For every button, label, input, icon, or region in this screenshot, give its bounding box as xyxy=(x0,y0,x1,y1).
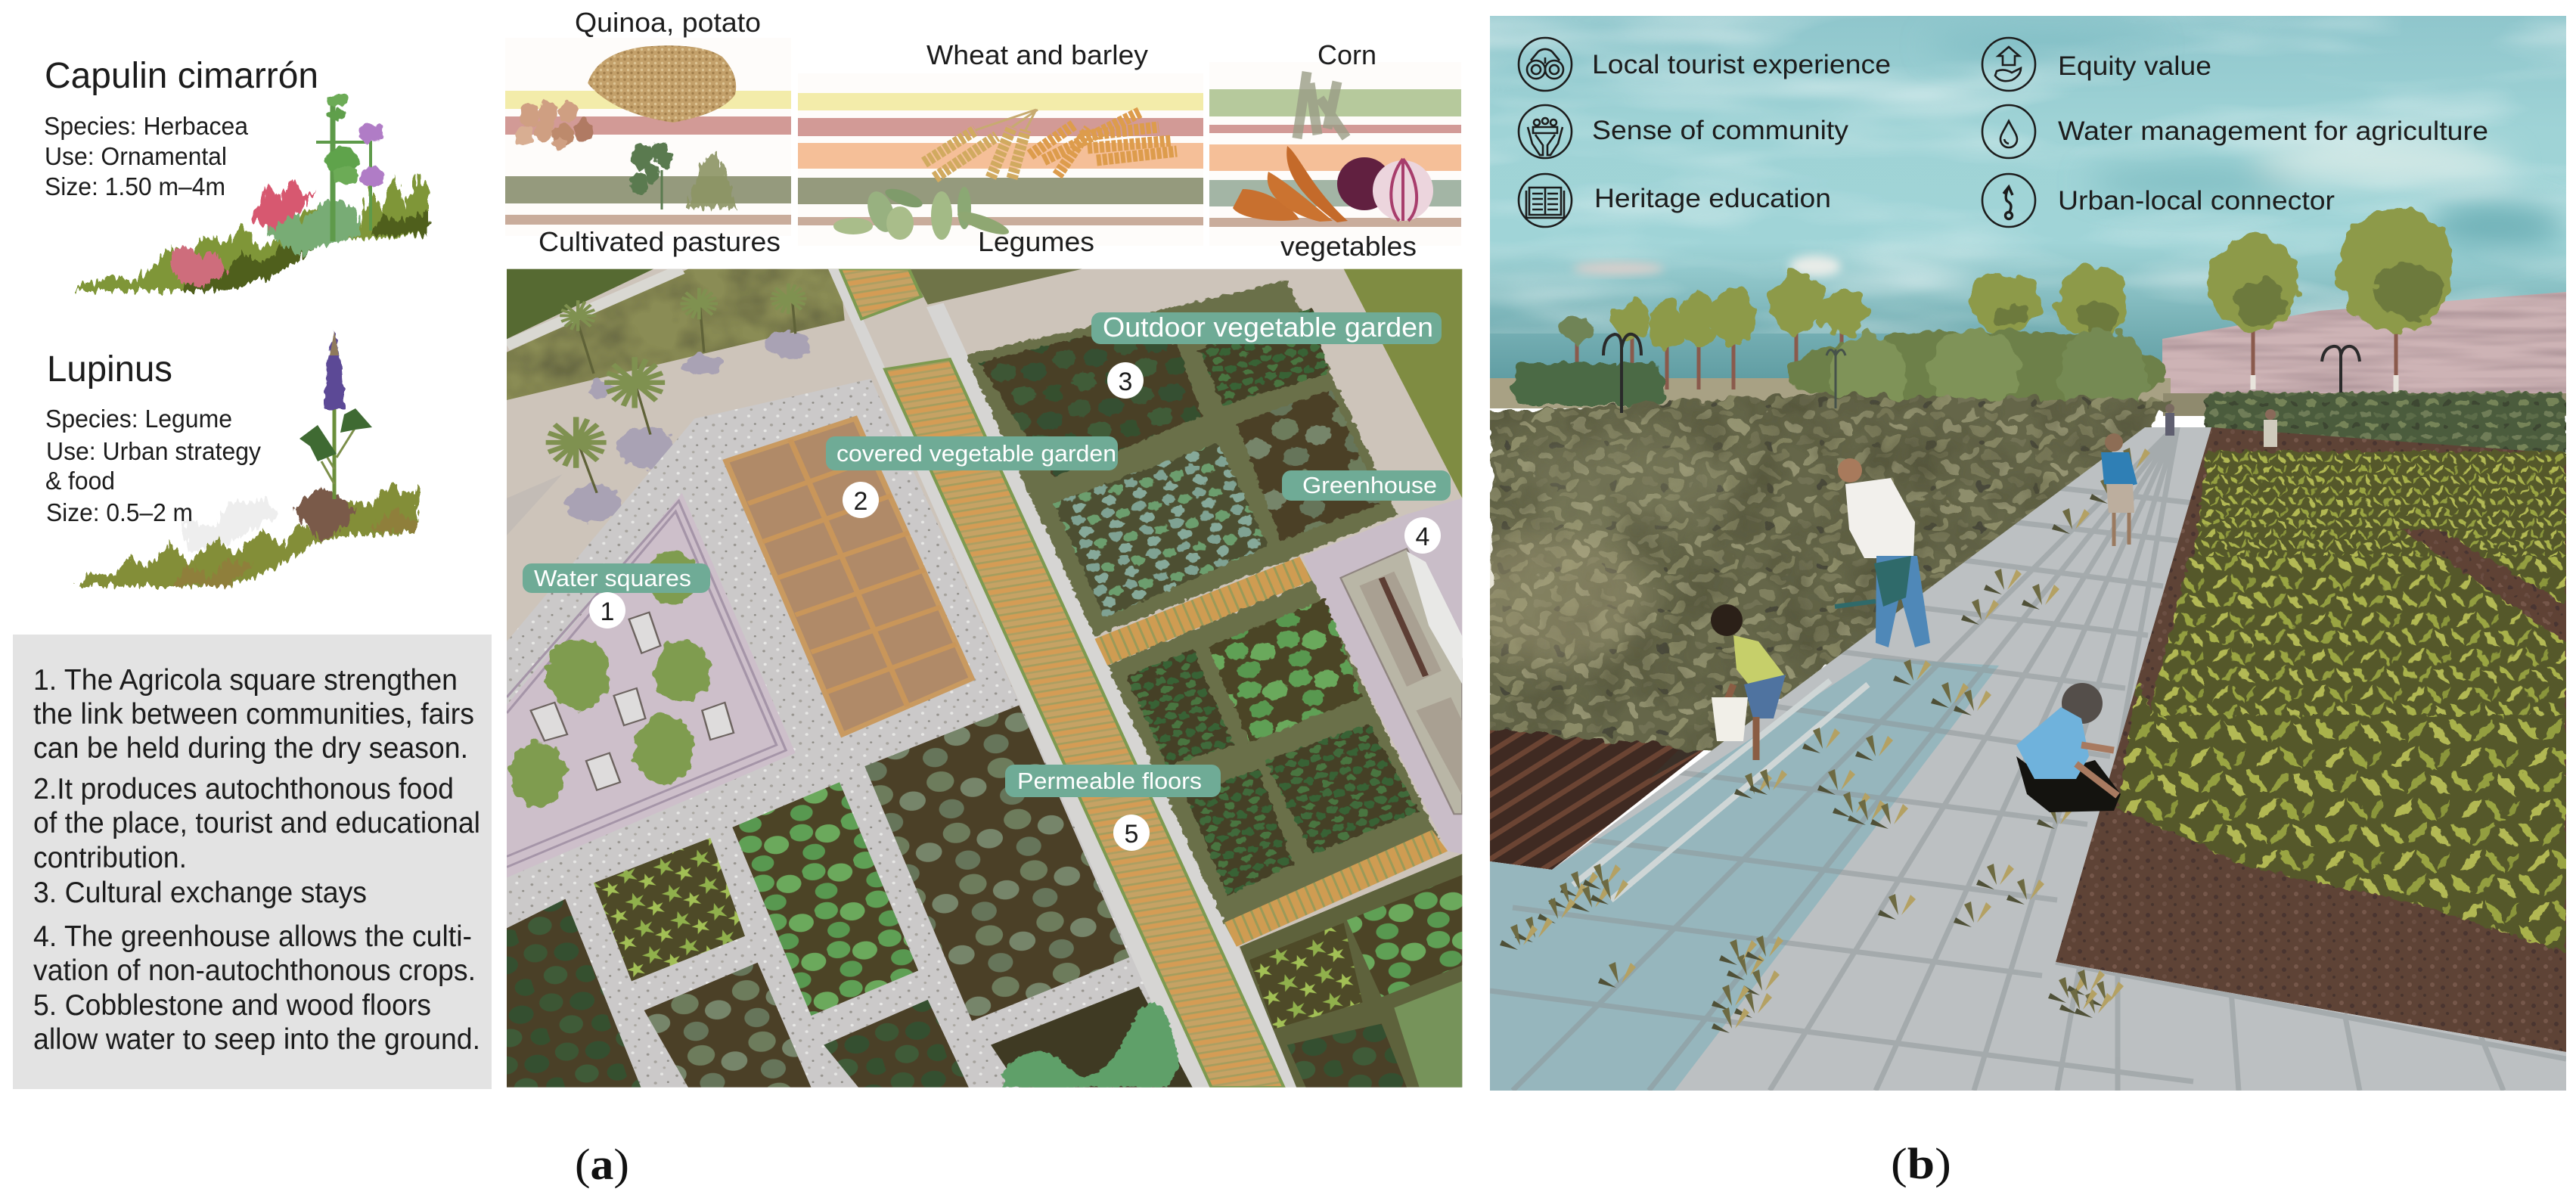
panel: numbered notes: 2.It produces autochthonous food xyxy=(33,773,454,805)
number markers: 3 xyxy=(1119,368,1132,396)
plant details xyxy=(44,112,249,200)
icon: water drop xyxy=(1982,105,2035,158)
plant details: Species: Legume xyxy=(45,405,232,433)
lamp posts xyxy=(1603,334,2360,413)
panel: numbered notes: can be held during the dry season. xyxy=(33,732,468,765)
panel: numbered notes xyxy=(13,635,492,1089)
panel: numbered notes: 3. Cultural exchange stays xyxy=(33,877,367,909)
panel: numbered notes: of the place, tourist and educational xyxy=(33,807,480,839)
text: Local tourist experience: Local tourist experience xyxy=(1592,50,1891,79)
sky xyxy=(1490,16,2566,394)
panel: numbered notes: 4. The greenhouse allows the culti- xyxy=(33,920,472,953)
trees xyxy=(1560,207,2453,395)
crop labels: Corn xyxy=(1317,39,1376,70)
stone path xyxy=(1490,424,2566,1091)
icon: binoculars xyxy=(1519,38,1572,91)
panel: Lupinus plant xyxy=(45,331,417,586)
plan drawing xyxy=(507,269,1462,1088)
plant name: Lupinus xyxy=(47,349,172,389)
icon: community hands xyxy=(1519,105,1572,158)
crop labels: Cultivated pastures xyxy=(538,226,781,257)
number markers xyxy=(589,362,1441,851)
label: Outdoor vegetable garden: Outdoor vegetable garden xyxy=(1103,312,1433,343)
panel: site plan xyxy=(507,269,1462,1088)
label: Water squares: Water squares xyxy=(534,565,691,591)
crop group: wheat and legumes xyxy=(798,73,1203,246)
text: Heritage education: Heritage education xyxy=(1594,184,1831,213)
panel: numbered notes: contribution. xyxy=(33,842,187,874)
plant details: Use: Ornamental xyxy=(45,142,227,170)
icon: house in hand xyxy=(1982,38,2035,91)
label: covered vegetable garden: covered vegetable garden xyxy=(836,440,1116,467)
text: Equity value: Equity value xyxy=(2058,51,2211,81)
plant details: Species: Herbacea xyxy=(44,112,249,140)
crop labels: Wheat and barley xyxy=(926,39,1148,70)
panel: numbered notes: allow water to seep into the ground. xyxy=(33,1023,480,1056)
plant details xyxy=(45,405,261,526)
crop group: quinoa and pastures xyxy=(505,38,791,236)
right garden beds xyxy=(966,281,1462,1088)
number markers: 2 xyxy=(854,487,867,516)
hillside illustration: Lupinus xyxy=(76,331,417,586)
number markers: 4 xyxy=(1416,523,1429,551)
crop group: corn and vegetables xyxy=(1209,62,1461,246)
walkways and boardwalk xyxy=(828,269,1302,1088)
panel: numbered notes: the link between communities, fairs xyxy=(33,698,474,731)
crop labels: Legumes xyxy=(978,226,1094,257)
left garden beds xyxy=(507,705,1193,1088)
text: Sense of community: Sense of community xyxy=(1592,116,1849,145)
icon: connector arrow xyxy=(1982,174,2035,227)
ground: soil and crops xyxy=(1490,424,2566,1052)
number markers: 1 xyxy=(601,597,614,626)
plant details: Size: 1.50 m–4m xyxy=(45,172,225,200)
panel: numbered notes: vation of non-autochthonous crops. xyxy=(33,954,476,987)
number markers: 5 xyxy=(1125,820,1138,849)
label: Greenhouse xyxy=(1282,470,1451,501)
plant details: & food xyxy=(45,467,115,495)
label: Permeable floors xyxy=(1005,765,1221,797)
panel: numbered notes: 5. Cobblestone and wood floors xyxy=(33,989,431,1022)
crop labels: Quinoa, potato xyxy=(575,7,761,38)
panel: numbered notes: 1. The Agricola square strengthen xyxy=(33,664,458,697)
text: Water management for agriculture: Water management for agriculture xyxy=(2058,116,2488,146)
greenhouse xyxy=(1340,548,1462,814)
panel: Capulin cimarrón plant xyxy=(44,56,428,290)
text: Urban-local connector: Urban-local connector xyxy=(2058,186,2335,216)
panel: crop strips xyxy=(505,7,1461,262)
person: woman in blue jacket xyxy=(2101,404,2277,546)
pergola xyxy=(726,419,972,734)
background hedges xyxy=(1513,329,2566,462)
crop labels: vegetables xyxy=(1280,231,1417,262)
benefit legend xyxy=(1519,38,2488,227)
caption (a): (a) xyxy=(575,1140,629,1189)
crop labels xyxy=(538,7,1417,262)
plant name: Capulin cimarrón xyxy=(45,56,318,96)
person: woman kneeling xyxy=(2016,683,2121,812)
fallen leaves xyxy=(1500,448,2150,1033)
label: Greenhouse: Greenhouse xyxy=(1302,472,1437,498)
caption (b): (b) xyxy=(1891,1139,1951,1188)
hillside illustration: Capulin xyxy=(76,94,428,290)
left hedge xyxy=(1490,395,2171,749)
plant details: Use: Urban strategy xyxy=(46,437,261,465)
distant hill xyxy=(2162,292,2566,396)
icon: book xyxy=(1519,174,1572,227)
plant details: Size: 0.5–2 m xyxy=(46,498,193,526)
label: Permeable floors: Permeable floors xyxy=(1017,768,1202,794)
person: man watering xyxy=(1835,458,1930,647)
panel: perspective view xyxy=(1452,16,2566,1091)
person: boy with bucket xyxy=(1711,604,1786,760)
